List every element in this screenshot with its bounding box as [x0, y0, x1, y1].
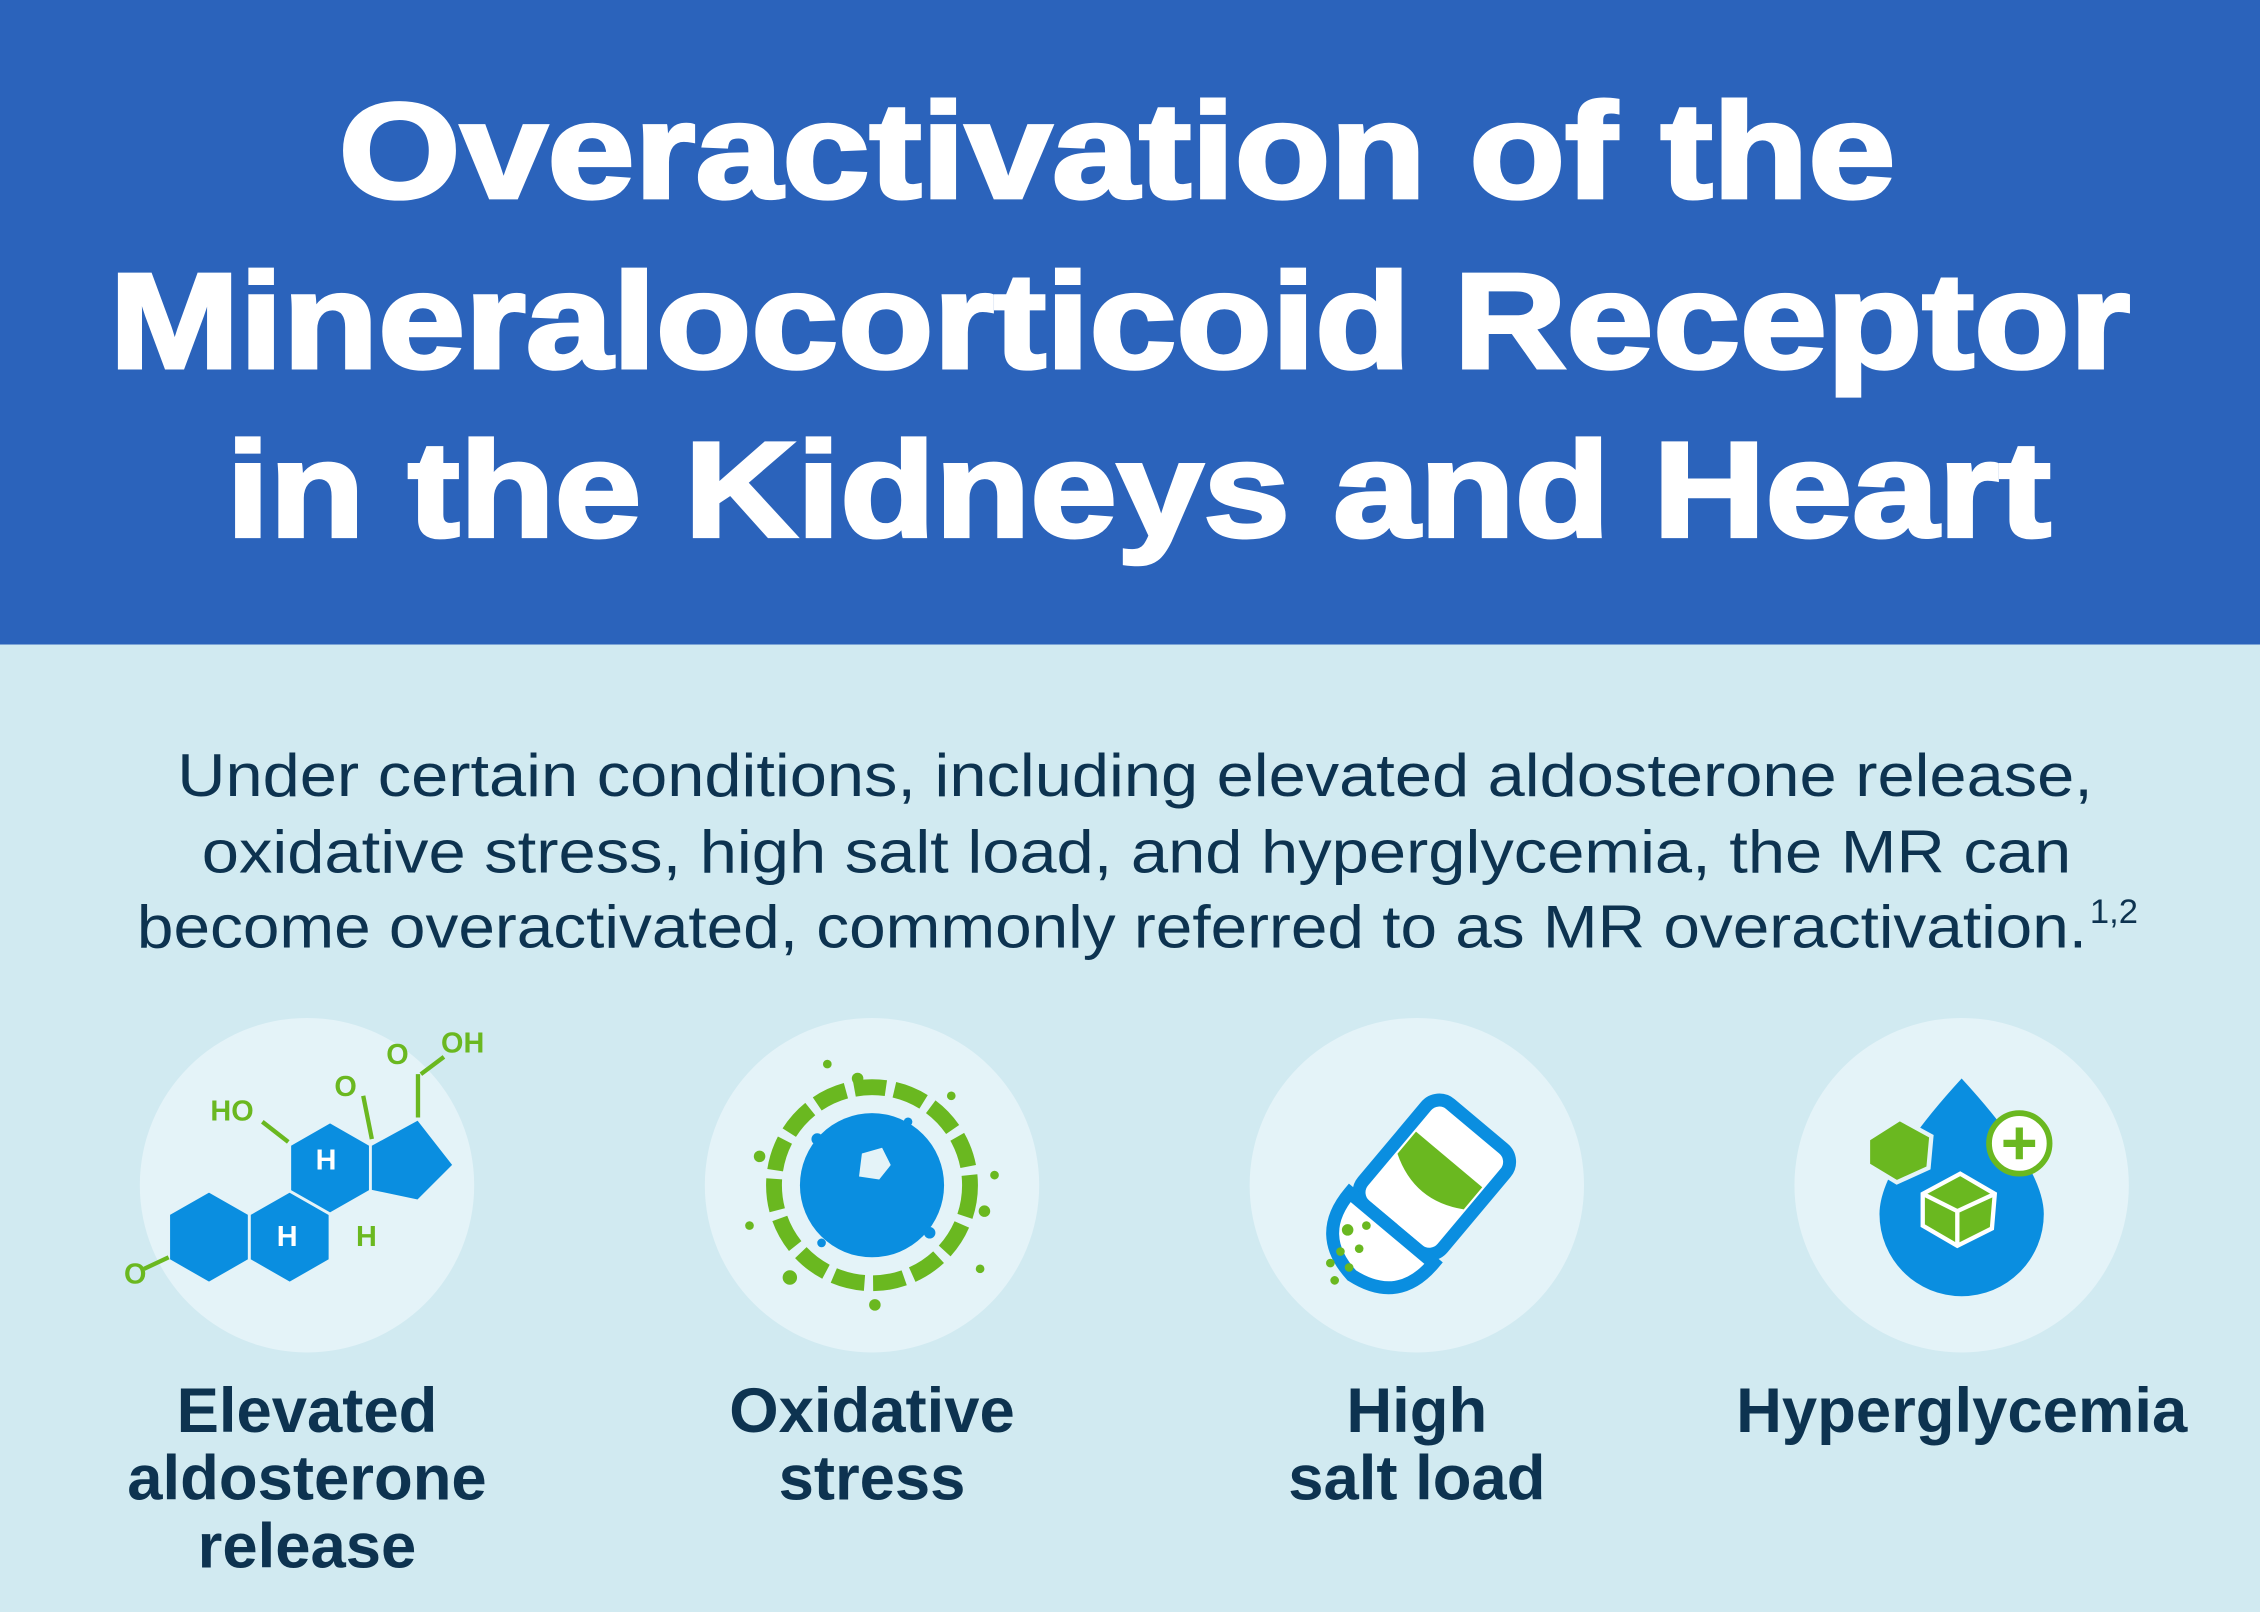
label	[127, 1376, 487, 1581]
title: in the Kidneys and Heart	[226, 413, 2051, 565]
label: Oxidative	[729, 1376, 1015, 1446]
label: release	[198, 1511, 416, 1581]
title: Overactivation of the	[339, 75, 1895, 227]
header banner	[0, 0, 2260, 645]
intro paragraph: become overactivated, commonly referred to as MR overactivation.	[137, 892, 2087, 960]
icon: cell under stress	[745, 1060, 999, 1311]
item: oxidative stress	[705, 1018, 1039, 1514]
label: salt load	[1288, 1444, 1545, 1514]
label: High	[1346, 1376, 1487, 1446]
item: elevated aldosterone: OH	[441, 1028, 484, 1060]
item: hyperglycemia	[1736, 1018, 2188, 1446]
intro paragraph: Under certain conditions, including elevated aldosterone release,	[177, 741, 2093, 809]
item: elevated aldosterone	[124, 1018, 487, 1581]
icon: salt shaker	[1310, 1091, 1519, 1311]
label: aldosterone	[127, 1444, 487, 1514]
label: Hyperglycemia	[1736, 1376, 2188, 1446]
item: elevated aldosterone: HO	[210, 1095, 254, 1127]
label	[1288, 1376, 1545, 1514]
intro paragraph: 1,2	[2090, 893, 2138, 931]
label	[729, 1376, 1015, 1514]
item: elevated aldosterone: O	[386, 1039, 409, 1071]
intro paragraph: oxidative stress, high salt load, and hyperglycemia, the MR can	[202, 817, 2071, 885]
icon: steroid molecule: H	[277, 1221, 298, 1253]
item: high salt load	[1250, 1018, 1584, 1514]
title: Mineralocorticoid Receptor	[110, 245, 2130, 397]
item: elevated aldosterone: H	[356, 1221, 377, 1253]
item: elevated aldosterone: O	[124, 1258, 146, 1290]
icon: steroid molecule	[169, 1119, 454, 1283]
icon: glucose drop	[1868, 1079, 2050, 1296]
label: stress	[779, 1444, 965, 1514]
label: Elevated	[177, 1376, 437, 1446]
intro paragraph	[137, 741, 2138, 960]
icon: steroid molecule: H	[316, 1144, 336, 1176]
item: elevated aldosterone: O	[334, 1071, 357, 1103]
title	[110, 75, 2130, 565]
